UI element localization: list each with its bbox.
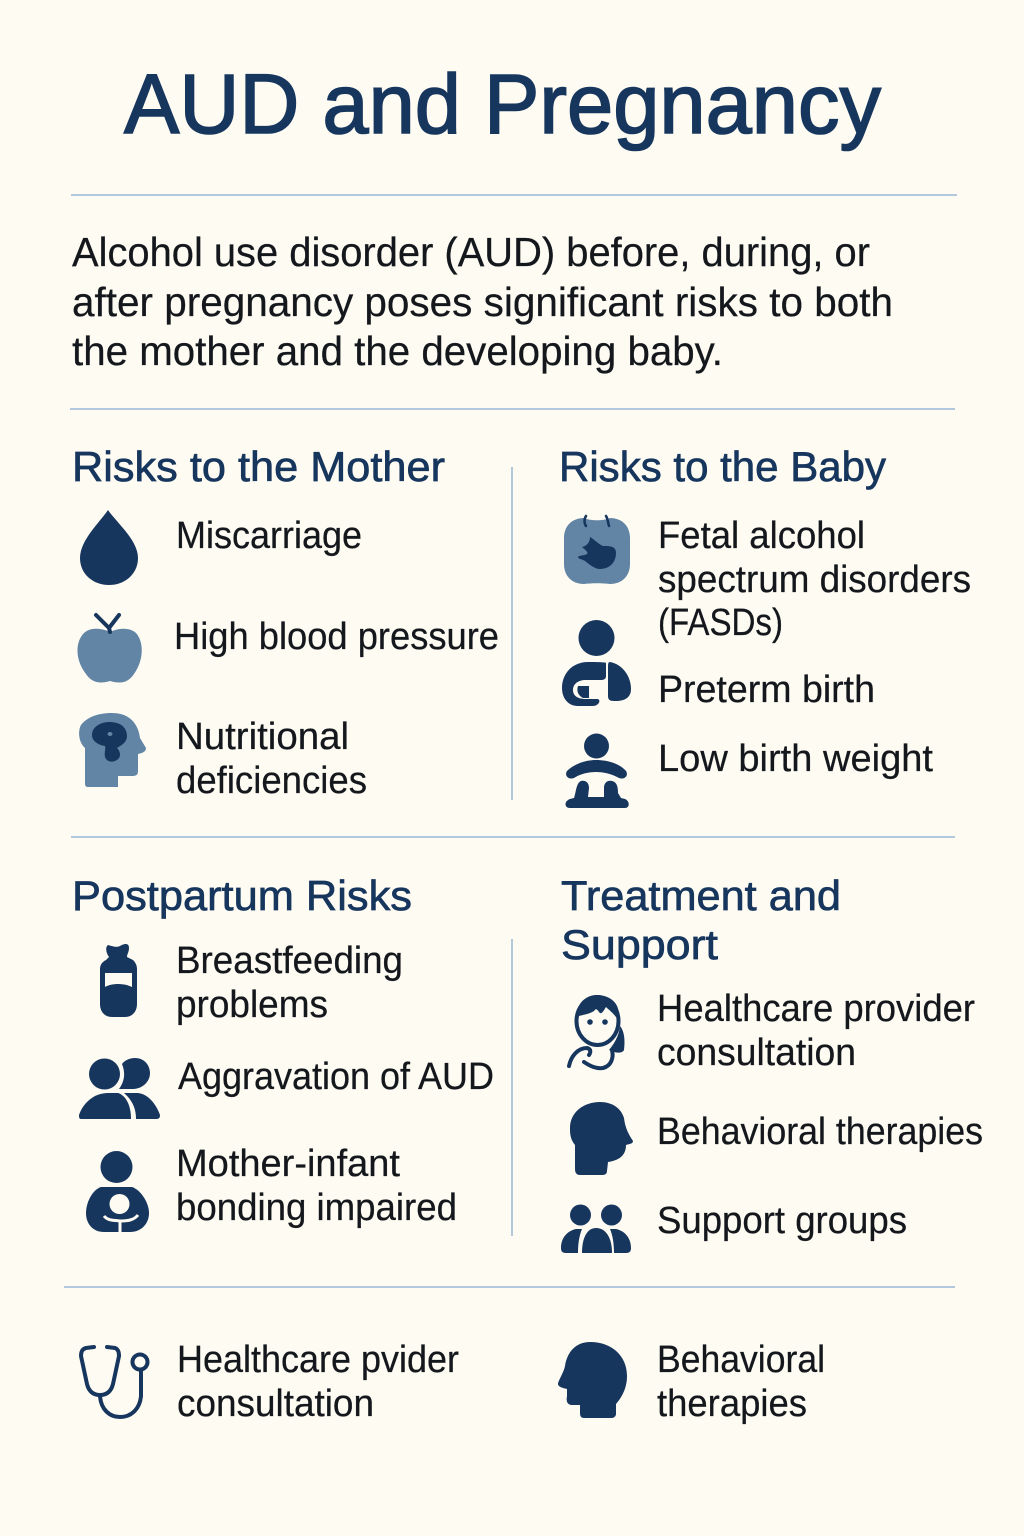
icon: fetus [564, 516, 630, 584]
item: support groups: Support groups [657, 1200, 907, 1242]
icon: support group [561, 1204, 631, 1253]
item: miscarriage: Miscarriage [176, 515, 362, 557]
panel: treatment and support [561, 872, 983, 1253]
heading: treatment and support: Treatment and [561, 872, 841, 919]
item: fetal alcohol spectrum disorders: spectrum disorders [658, 559, 971, 601]
heading: postpartum risks: Postpartum Risks [72, 872, 412, 919]
item: preterm birth: Preterm birth [658, 669, 875, 711]
intro text: the mother and the developing baby. [72, 328, 723, 374]
icon: two people [79, 1058, 160, 1119]
item: high blood pressure: High blood pressure [174, 616, 499, 658]
intro text [72, 229, 893, 374]
item: low birth weight: Low birth weight [658, 738, 933, 780]
item: behavioral therapies [657, 1339, 825, 1425]
icon: stethoscope [81, 1347, 148, 1417]
item: healthcare provider consultation: consultation [657, 1032, 856, 1074]
icon: mother holding infant [86, 1151, 149, 1232]
icon: baby with mother [562, 620, 631, 706]
item: nutritional deficiencies [176, 716, 367, 802]
item: behavioral therapies: therapies [657, 1383, 807, 1425]
item: behavioral therapies: Behavioral [657, 1339, 825, 1381]
panel: risks to the baby [559, 443, 971, 808]
item: aggravation of AUD: Aggravation of AUD [178, 1056, 494, 1098]
item: healthcare provider consultation [657, 988, 975, 1074]
icon: sitting baby [566, 734, 629, 808]
item: behavioral therapies: Behavioral therapies [657, 1111, 983, 1153]
item: healthcare provider consultation: Healthcare provider [657, 988, 975, 1030]
panel: risks to the mother [72, 443, 499, 802]
icon: apple [77, 615, 142, 683]
icon: drop [80, 510, 138, 585]
icon: bottle [100, 944, 137, 1017]
heading: treatment and support [561, 872, 841, 968]
item: mother-infant bonding impaired: Mother-infant [176, 1143, 400, 1185]
item: mother-infant bonding impaired: bonding impaired [176, 1187, 457, 1229]
item: nutritional deficiencies: deficiencies [176, 760, 367, 802]
item: fetal alcohol spectrum disorders: (FASDs) [658, 602, 783, 644]
panel: bottom row [81, 1339, 825, 1425]
icon: head with brain [79, 713, 146, 787]
heading: risks to the baby: Risks to the Baby [559, 443, 886, 490]
item: breastfeeding problems [176, 940, 403, 1026]
icon: head silhouette facing left [558, 1342, 627, 1418]
item: mother-infant bonding impaired [176, 1143, 457, 1229]
icon: provider face with stethoscope [569, 995, 625, 1068]
item: fetal alcohol spectrum disorders [658, 515, 971, 644]
item: healthcare pvider consultation [177, 1339, 459, 1425]
item: fetal alcohol spectrum disorders: Fetal alcohol [658, 515, 865, 557]
title: AUD and Pregnancy [124, 57, 881, 151]
heading: treatment and support: Support [561, 921, 718, 968]
item: breastfeeding problems: problems [176, 984, 328, 1026]
intro text: after pregnancy poses significant risks to both [72, 279, 893, 325]
item: breastfeeding problems: Breastfeeding [176, 940, 403, 982]
panel: postpartum risks [72, 872, 494, 1232]
intro text: Alcohol use disorder (AUD) before, during, or [72, 229, 870, 275]
item: healthcare pvider consultation: consultation [177, 1383, 374, 1425]
icon: head silhouette [570, 1102, 633, 1175]
item: nutritional deficiencies: Nutritional [176, 716, 349, 758]
item: healthcare pvider consultation: Healthcare pvider [177, 1339, 459, 1381]
heading: risks to the mother: Risks to the Mother [72, 443, 445, 490]
